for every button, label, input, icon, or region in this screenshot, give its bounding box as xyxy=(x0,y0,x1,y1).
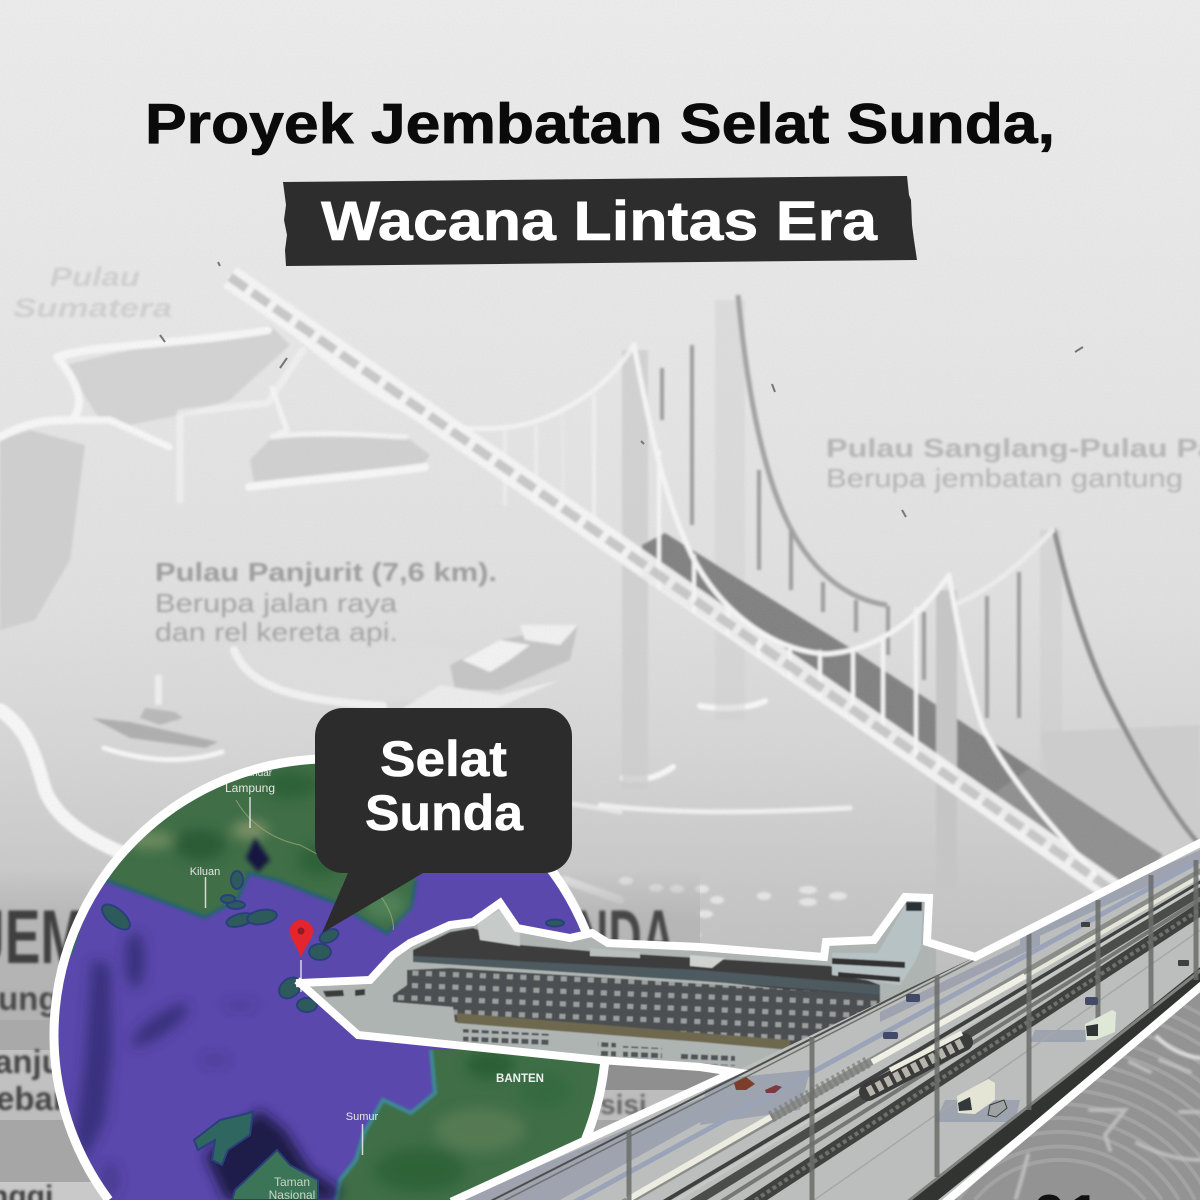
map labels: Taman xyxy=(274,1175,310,1189)
light rail train xyxy=(868,1033,964,1092)
white ring xyxy=(54,759,606,1200)
faded background map and bridge illustration xyxy=(0,262,1200,938)
label leader lines xyxy=(206,797,362,1155)
land: Banten xyxy=(336,1050,610,1200)
map labels: Sumur xyxy=(346,1111,379,1123)
faded lower text panels: sisi xyxy=(600,1089,647,1120)
callout: Selat Sunda: Sunda xyxy=(365,785,524,841)
land: Lampung xyxy=(100,755,425,933)
map labels: Lampung xyxy=(225,781,275,795)
background labels: Berupa jalan raya xyxy=(155,588,398,618)
sea floor shading xyxy=(75,932,256,1198)
background labels: Pulau Panjurit (7,6 km). xyxy=(155,557,497,587)
white cut-out outline xyxy=(300,843,1200,1200)
subtitle tape banner: Wacana Lintas Era xyxy=(321,189,878,252)
road shadows xyxy=(458,850,1200,1200)
subtitle tape banner xyxy=(283,176,917,266)
background towers xyxy=(622,300,1062,890)
map circle inset xyxy=(50,755,610,1200)
satellite map xyxy=(50,755,610,1200)
map coastlines xyxy=(0,330,850,900)
background ships xyxy=(92,625,578,748)
icon: red location pin xyxy=(290,920,313,958)
background labels: Pulau Sanglang-Pulau Pa xyxy=(826,433,1200,463)
map labels: Kiluan xyxy=(190,866,220,878)
callout: Selat Sunda: Selat xyxy=(380,731,507,787)
background labels: Berupa jembatan gantung xyxy=(826,463,1183,493)
rails, barriers and pipes xyxy=(490,858,1200,1200)
background labels xyxy=(13,262,1200,647)
ship and bridge cut-out image xyxy=(294,838,1200,1200)
vehicles xyxy=(734,922,1189,1117)
background labels: Pulau xyxy=(50,262,141,292)
small background dots xyxy=(619,877,847,938)
map labels: BANTEN xyxy=(496,1073,544,1085)
dark strait around Panaitan xyxy=(205,1110,340,1200)
rear bridge cables and hangers xyxy=(505,295,1198,843)
faded lower text panels xyxy=(0,870,720,1200)
gantry posts xyxy=(629,860,1196,1200)
main bridge cable and hangers xyxy=(230,277,1100,880)
bridge road deck xyxy=(464,848,1200,1200)
background labels: Sumatera xyxy=(13,293,172,323)
dark bridge deck xyxy=(642,533,1163,898)
background labels: dan rel kereta api. xyxy=(155,617,398,647)
water and land tones xyxy=(0,325,1200,900)
callout: Selat Sunda xyxy=(315,708,572,933)
map labels: Bandar xyxy=(240,768,273,779)
bridge deck truss xyxy=(230,277,1115,892)
map labels xyxy=(190,768,544,1200)
islands xyxy=(60,871,564,1200)
cruise ship xyxy=(296,895,936,1075)
ripple pattern, lower right xyxy=(954,992,1200,1200)
title: Proyek Jembatan Selat Sunda, xyxy=(145,92,1055,156)
faded lower text panels: NDA xyxy=(575,895,675,980)
